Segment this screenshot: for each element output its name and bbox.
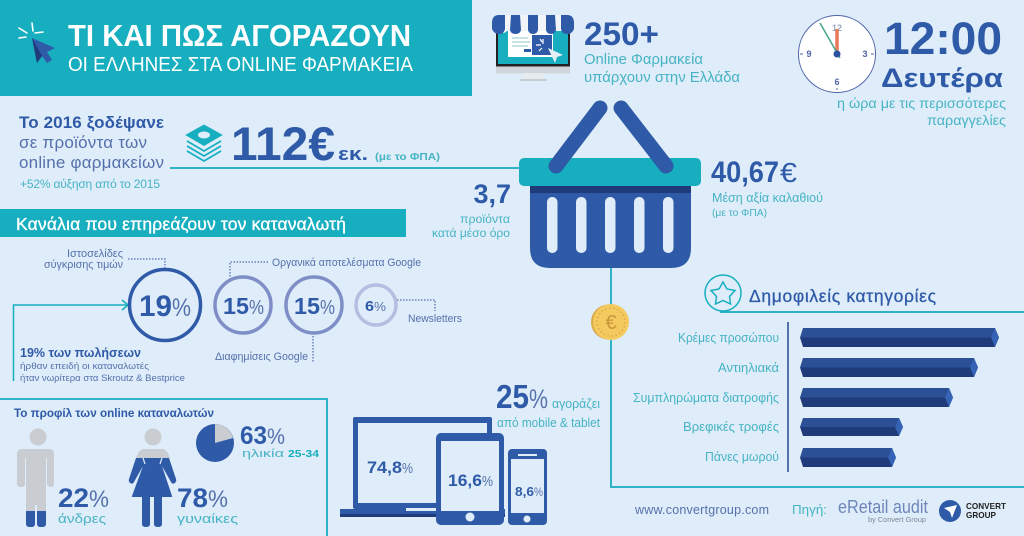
stat: women 78% <box>177 483 238 526</box>
stat: peak order time: η ώρα με τις περισσότερες <box>837 96 1007 111</box>
connector lines <box>0 168 1024 536</box>
icon: clock: 6 <box>834 77 840 87</box>
stat: 250+ pharmacies <box>584 16 740 86</box>
heading: popular categories: Δημοφιλείς κατηγορίες <box>749 286 936 306</box>
channel: organic Google 15%: Οργανικά αποτελέσματα Google <box>272 257 421 269</box>
stat: mobile and tablet 25%: από mobile & tablet <box>497 415 600 430</box>
icon: online store monitor <box>492 15 574 81</box>
source label: Πηγή: <box>792 502 827 517</box>
stat: mobile and tablet 25% <box>496 378 600 430</box>
stat: age 63%: ηλικία <box>242 448 285 460</box>
stat: basket value: 40,67 <box>711 156 779 189</box>
icon: tablet 16,6% <box>436 433 504 525</box>
icon: clock: 12 <box>832 23 842 33</box>
stat: basket value: Μέση αξία καλαθιού <box>712 191 823 205</box>
icon: laptop 74,8% <box>340 417 505 517</box>
channel: newsletters 6%: Newsletters <box>408 313 462 325</box>
bar: face creams: Κρέμες προσώπου <box>678 331 779 345</box>
heading bar: channels: Κανάλια που επηρεάζουν τον καταναλωτή <box>16 214 346 234</box>
icon: laptop 74,8%: 74,8 <box>367 458 402 477</box>
title: ΤΙ ΚΑΙ ΠΩΣ ΑΓΟΡΑΖΟΥΝ <box>68 18 411 53</box>
stat: peak order time: παραγγελίες <box>927 113 1007 128</box>
channel: organic Google 15%: 15 <box>223 293 249 319</box>
sales note: 19% των πωλήσεων <box>20 346 141 360</box>
spending text block <box>19 113 164 191</box>
icon: phone 8,6%: % <box>534 485 543 499</box>
icon: star <box>705 275 741 311</box>
bar: supplements: Συμπληρώματα διατροφής <box>633 391 779 405</box>
spending text block: +52% αύξηση από το 2015 <box>20 177 160 191</box>
channel: organic Google 15% <box>215 257 421 333</box>
stat: age 63% <box>240 422 319 460</box>
bar: anti-sun: Αντιηλιακά <box>718 361 779 375</box>
stat: men 22%: % <box>89 486 109 513</box>
icon: tablet 16,6%: % <box>482 473 493 490</box>
stat: average products: κατά μέσο όρο <box>432 226 510 240</box>
icon: phone 8,6% <box>508 449 547 525</box>
icon: clock <box>798 16 876 92</box>
sales note <box>20 346 185 384</box>
stat: age 63%: % <box>267 424 285 449</box>
channel: newsletters 6%: % <box>374 299 386 314</box>
bar: anti-sun <box>718 358 978 377</box>
channel: organic Google 15%: % <box>249 297 264 319</box>
spending text block: online φαρμακείων <box>19 153 164 172</box>
footer <box>634 497 1007 524</box>
stat: mobile and tablet 25%: 25 <box>496 378 529 415</box>
sales note: ήρθαν επειδή οι καταναλωτές <box>20 361 149 372</box>
stat: 250+ pharmacies: 250+ <box>584 16 659 52</box>
logo: Convert Group <box>939 500 1007 522</box>
stat: average products: προϊόντα <box>460 212 510 226</box>
stat: women 78%: % <box>208 486 228 513</box>
bar: baby food <box>683 418 903 436</box>
channel: price comparison 19% <box>44 248 200 340</box>
heading bar: channels <box>0 209 406 237</box>
icon: shopping basket <box>519 108 701 268</box>
profile heading: Το προφίλ των online καταναλωτών <box>14 408 214 420</box>
spending text block: σε προϊόντα των <box>19 133 147 152</box>
stat: men 22%: άνδρες <box>58 511 106 526</box>
channel: Google ads 15% <box>215 277 342 363</box>
stat: age 63%: 63 <box>240 422 267 450</box>
stat: average products: 3,7 <box>473 179 511 209</box>
channel: price comparison 19%: σύγκρισης τιμών <box>44 259 123 271</box>
icon: clock: 9 <box>806 49 812 59</box>
icon: money stack <box>187 126 221 161</box>
stat: men 22% <box>58 483 109 526</box>
channel: newsletters 6% <box>356 285 462 325</box>
stat: age 63%: 25-34 <box>288 448 319 460</box>
channel: newsletters 6%: 6 <box>365 298 374 315</box>
stat: 112 euro <box>231 117 440 170</box>
icon: tablet 16,6%: 16,6 <box>448 471 482 490</box>
stat: peak order time: Δευτέρα <box>881 63 1003 93</box>
stat: average products <box>432 179 511 240</box>
channel: price comparison 19%: Ιστοσελίδες <box>67 248 123 260</box>
title banner <box>0 0 472 96</box>
spending text block: Το 2016 ξοδέψανε <box>19 113 164 132</box>
stat: mobile and tablet 25%: % <box>529 384 548 414</box>
bar: diapers: Πάνες μωρού <box>705 450 779 464</box>
subtitle: ΟΙ ΕΛΛΗΝΕΣ ΣΤΑ ONLINE ΦΑΡΜΑΚΕΙΑ <box>68 54 414 76</box>
stat: 250+ pharmacies: Online Φαρμακεία <box>584 51 703 68</box>
channel: price comparison 19%: 19 <box>139 290 172 323</box>
icon: woman <box>129 428 176 527</box>
bar: supplements <box>633 388 953 407</box>
chart: popular categories bars <box>633 322 999 472</box>
bar: baby food: Βρεφικές τροφές <box>683 420 779 434</box>
icon: clock: 3 <box>862 49 868 59</box>
sales note: ήταν νωρίτερα στα Skroutz & Bestprice <box>20 373 185 384</box>
icon: phone 8,6%: 8,6 <box>515 484 534 499</box>
stat: 112 euro: (με το ΦΠΑ) <box>375 152 440 163</box>
stat: women 78%: 78 <box>177 483 208 513</box>
logo: Convert Group: GROUP <box>966 510 996 520</box>
stat: 112 euro: εκ. <box>338 144 368 164</box>
channel: Google ads 15%: 15 <box>294 293 320 319</box>
icon: man <box>17 428 54 527</box>
website: www.convertgroup.com <box>634 503 769 517</box>
logo: eRetail audit: eRetail audit <box>838 497 928 517</box>
stat: mobile and tablet 25%: αγοράζει <box>552 397 600 411</box>
stat: basket value <box>711 156 823 219</box>
arrow: to 19 percent circle <box>14 300 128 381</box>
stat: 250+ pharmacies: υπάρχουν στην Ελλάδα <box>584 69 740 86</box>
logo: Convert Group: CONVERT <box>966 501 1007 511</box>
stat: men 22%: 22 <box>58 483 89 513</box>
bar: diapers <box>705 448 896 467</box>
logo: eRetail audit <box>838 497 928 524</box>
bar: face creams <box>678 328 999 347</box>
heading: popular categories <box>705 275 936 311</box>
channel: price comparison 19%: % <box>172 294 191 322</box>
channel: Google ads 15%: Διαφημίσεις Google <box>215 351 308 363</box>
chart: age pie <box>196 424 234 462</box>
stat: 112 euro: 112€ <box>231 117 335 170</box>
stat: basket value: € <box>780 157 797 188</box>
panel: consumer profile <box>14 408 319 527</box>
icon: laptop 74,8%: % <box>402 460 413 477</box>
stat: women 78%: γυναίκες <box>177 511 238 526</box>
icon: euro coin: € <box>605 312 617 334</box>
logo: eRetail audit: by Convert Group <box>868 515 926 524</box>
icon: cursor click <box>19 23 55 63</box>
stat: peak order time: 12:00 <box>884 13 1002 64</box>
channel: Google ads 15%: % <box>320 297 335 319</box>
icon: euro coin <box>591 304 629 340</box>
stat: basket value: (με το ΦΠΑ) <box>712 208 767 219</box>
stat: peak order time <box>837 13 1007 128</box>
dotted leaders <box>128 259 435 362</box>
